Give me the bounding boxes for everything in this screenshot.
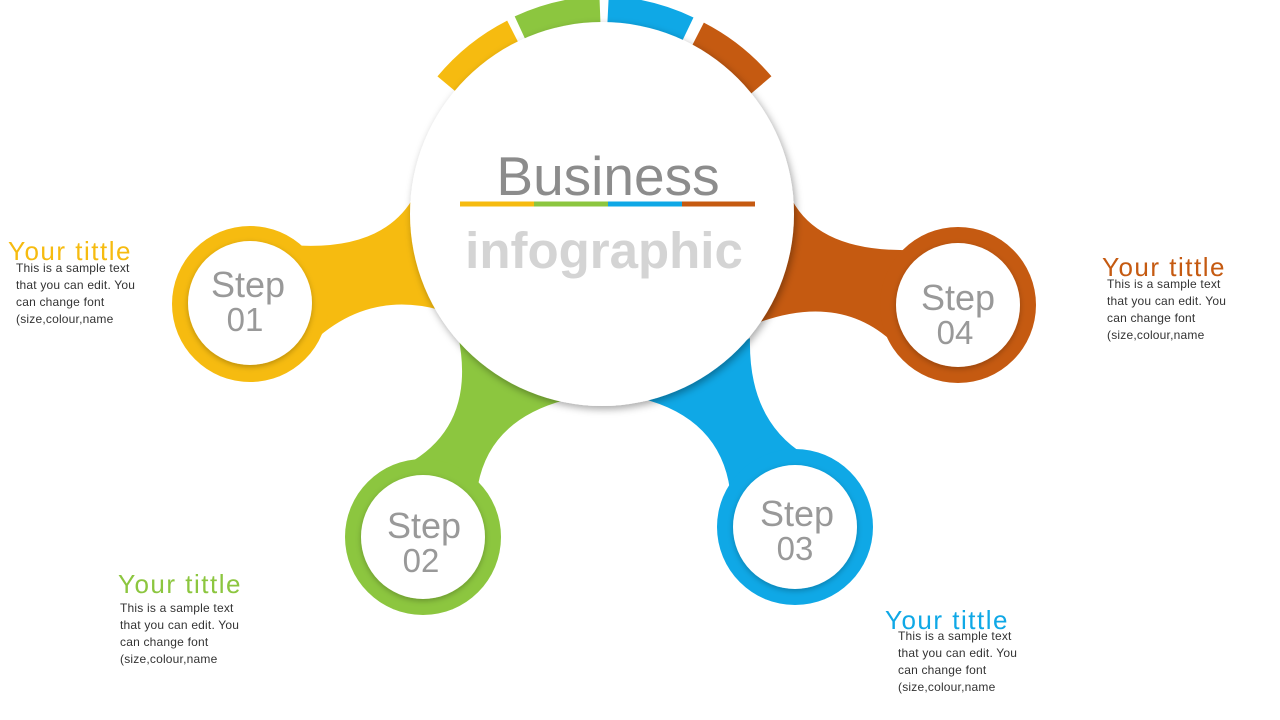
ring: step 04 [880, 227, 1036, 383]
ring: step 04: Step [921, 277, 995, 318]
text block: step 03 [885, 605, 1017, 694]
text block: step 02: This is a sample text [120, 601, 234, 615]
ring: step 02: 02 [403, 542, 439, 579]
text block: step 01: (size,colour,name [16, 312, 113, 326]
text block: step 04: that you can edit. You [1107, 294, 1226, 308]
text block: step 01 [8, 236, 135, 326]
subtitle: infographic: infographic [465, 222, 743, 279]
text block: step 04: This is a sample text [1107, 277, 1221, 291]
text block: step 02 [118, 569, 242, 666]
arm: step 02 [400, 335, 565, 537]
text block: step 03: can change font [898, 663, 986, 677]
text block: step 03: This is a sample text [898, 629, 1012, 643]
top tabs [449, 11, 760, 86]
text block: step 01: Your tittle [8, 236, 132, 266]
text block: step 01: that you can edit. You [16, 278, 135, 292]
text block: step 01: can change font [16, 295, 104, 309]
ring: step 03 [717, 449, 873, 605]
ring: step 03: 03 [777, 530, 813, 567]
text block: step 03: that you can edit. You [898, 646, 1017, 660]
ring: step 04: 04 [937, 314, 973, 351]
arm: step 01 [250, 200, 440, 355]
text block: step 04 [1102, 252, 1226, 342]
text block: step 02: that you can edit. You [120, 618, 239, 632]
text block: step 02: can change font [120, 635, 208, 649]
divider colored [460, 202, 755, 206]
text block: step 04: can change font [1107, 311, 1195, 325]
ring: step 01 [172, 226, 328, 382]
ring: step 01: Step [211, 264, 285, 305]
text block: step 02: Your tittle [118, 569, 242, 599]
ring: step 02 [345, 459, 501, 615]
arm: step 03 [640, 338, 805, 527]
text block: step 03: Your tittle [885, 605, 1009, 635]
text block: step 01: This is a sample text [16, 261, 130, 275]
center circle [410, 22, 794, 406]
ring: step 02: Step [387, 505, 461, 546]
title: Business: Business [496, 145, 720, 207]
text block: step 04: (size,colour,name [1107, 328, 1204, 342]
ring: step 01: 01 [227, 301, 263, 338]
arm: step 04 [760, 200, 958, 355]
text block: step 02: (size,colour,name [120, 652, 217, 666]
ring: step 03: Step [760, 493, 834, 534]
text block: step 03: (size,colour,name [898, 680, 995, 694]
text block: step 04: Your tittle [1102, 252, 1226, 282]
